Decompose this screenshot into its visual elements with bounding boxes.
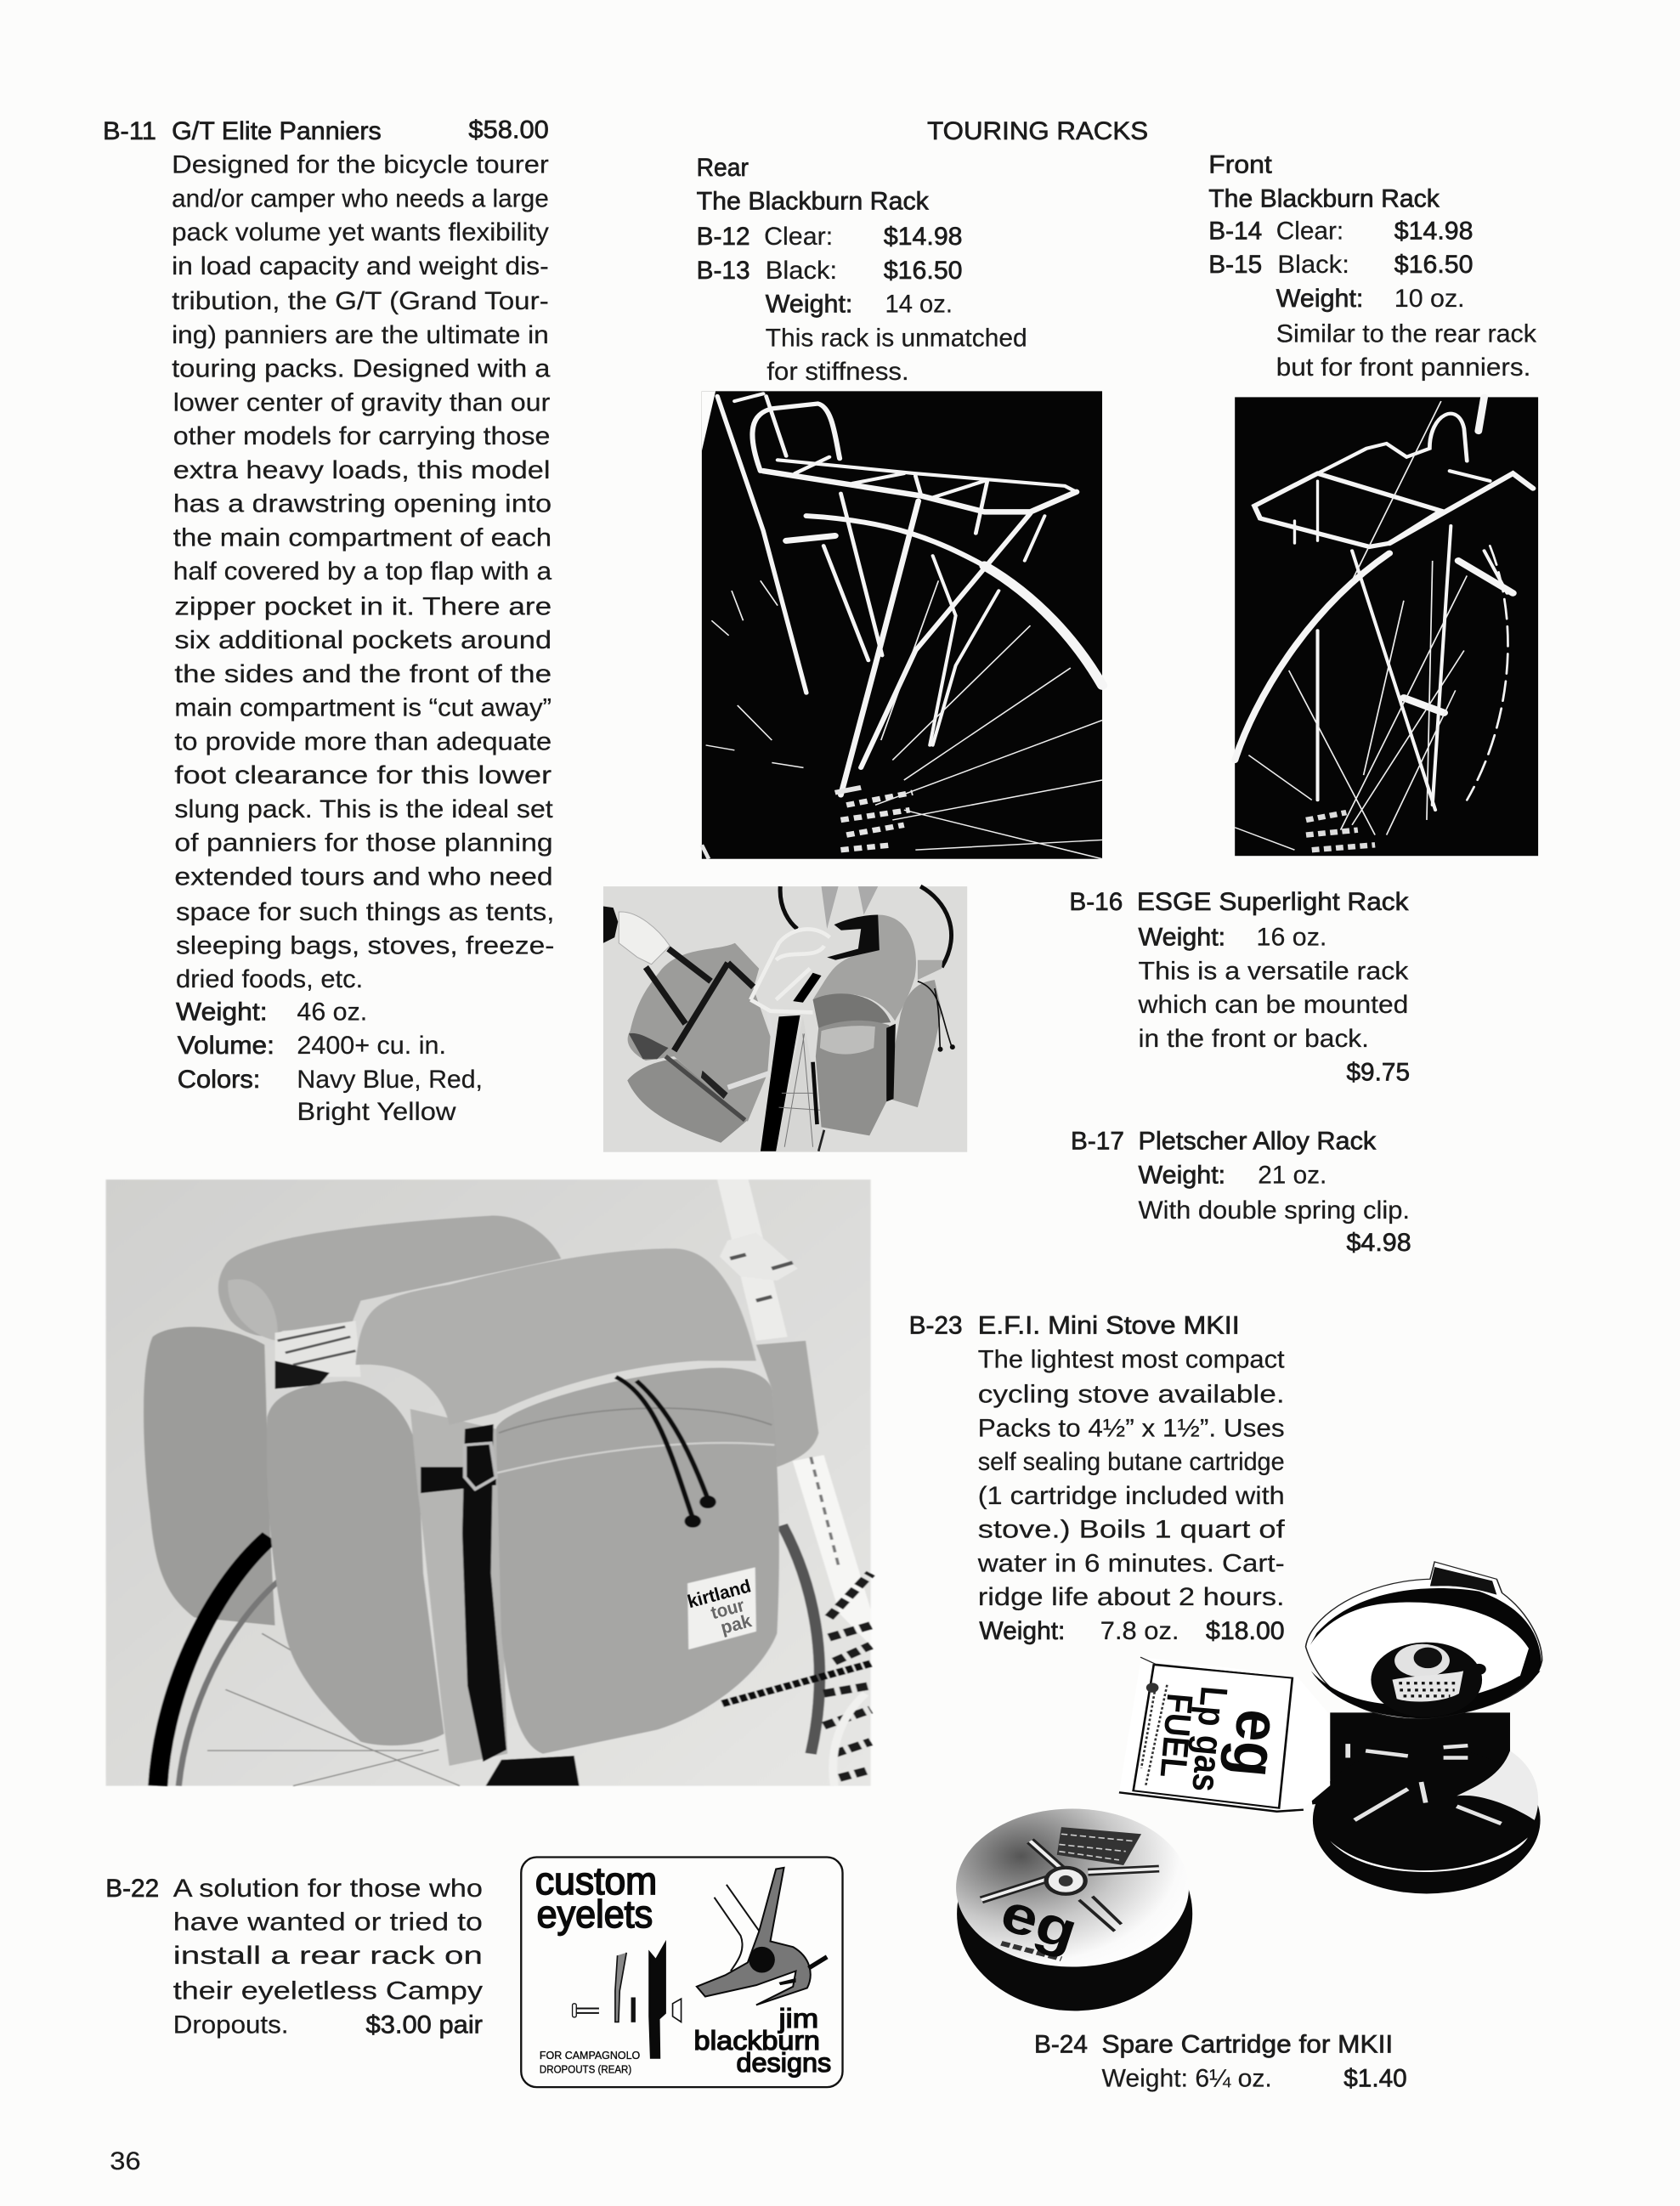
- brand label on pannier: [685, 1575, 761, 1645]
- description paragraph: six additional pockets around: [174, 626, 552, 654]
- panel: B-24 Spare Cartridge: B-24: [1034, 2031, 1088, 2059]
- panel: B-17 Pletscher Alloy Rack: Pletscher Alloy Rack: [1138, 1128, 1376, 1156]
- description paragraph: extra heavy loads, this model: [173, 456, 550, 484]
- panel: B-23 E.F.I. Mini Stove: cycling stove available.: [978, 1381, 1285, 1409]
- logo: custom eyelets, Jim Blackburn Designs: blackburn: [694, 2025, 820, 2056]
- panel: rear rack text: $16.50: [884, 257, 963, 285]
- fuel can label: [1152, 1685, 1293, 1794]
- panel: B-16 ESGE Superlight Rack: $9.75: [1347, 1059, 1410, 1087]
- logo: custom eyelets, Jim Blackburn Designs: custom: [535, 1859, 657, 1903]
- panel: B-17 Pletscher Alloy Rack: 21 oz.: [1258, 1161, 1326, 1189]
- panel: B-22 eyelets text: A solution for those who: [173, 1875, 483, 1903]
- description paragraph: to provide more than adequate: [174, 727, 552, 755]
- description paragraph: in load capacity and weight dis-: [172, 252, 549, 280]
- panel: B-16 ESGE Superlight Rack: 16 oz.: [1257, 924, 1326, 952]
- specifications: [176, 998, 483, 1126]
- brand label on pannier: kirtland: [685, 1575, 753, 1612]
- brand label on pannier: tour: [709, 1595, 747, 1623]
- panel: front rack text: Black:: [1277, 251, 1349, 279]
- photo: stove and fuel cartridges: [956, 1562, 1542, 2011]
- panel: front rack text: $16.50: [1394, 251, 1474, 279]
- panel: B-16 ESGE Superlight Rack: B-16: [1069, 888, 1123, 916]
- specifications: 46 oz.: [297, 998, 367, 1026]
- stove lid with burner: [1306, 1562, 1542, 1719]
- description paragraph: [172, 151, 554, 993]
- specifications: Navy Blue, Red,: [297, 1066, 483, 1094]
- panel: B-23 E.F.I. Mini Stove: (1 cartridge included with: [978, 1482, 1285, 1510]
- description paragraph: lower center of gravity than our: [173, 388, 551, 416]
- description paragraph: space for such things as tents,: [176, 898, 554, 926]
- specifications: Bright Yellow: [297, 1098, 456, 1126]
- description paragraph: slung pack. This is the ideal set: [174, 795, 554, 823]
- panel: B-23 E.F.I. Mini Stove: The lightest most compact: [978, 1345, 1285, 1373]
- panel: B-22 eyelets text: $3.00 pair: [366, 2011, 483, 2039]
- description paragraph: zipper pocket in it. There are: [174, 593, 552, 621]
- exploded eyelet parts: [573, 1940, 682, 2059]
- panel: B-23 E.F.I. Mini Stove: E.F.I. Mini Stove MKII: [978, 1312, 1240, 1340]
- heading: Touring Racks: TOURING RACKS: [927, 117, 1148, 145]
- panel: B-23 E.F.I. Mini Stove: 7.8 oz.: [1100, 1617, 1179, 1645]
- panel: rear rack text: B-13: [697, 257, 750, 285]
- panel: B-16 ESGE Superlight Rack: Weight:: [1138, 924, 1225, 952]
- panel: B-22 eyelets text: Dropouts.: [173, 2011, 289, 2039]
- description paragraph: touring packs. Designed with a: [172, 355, 551, 383]
- photo: Kirtland Tour Pak panniers on bicycle: [106, 1179, 871, 1786]
- specifications: Volume:: [178, 1032, 274, 1060]
- panel: B-22 eyelets text: [105, 1875, 483, 2039]
- panel: B-23 E.F.I. Mini Stove: [909, 1312, 1286, 1645]
- panel: front rack text: $14.98: [1394, 217, 1474, 245]
- item heading B-11: G/T Elite Panniers: [172, 117, 382, 145]
- description paragraph: dried foods, etc.: [176, 965, 363, 993]
- panel: B-17 Pletscher Alloy Rack: Weight:: [1138, 1161, 1225, 1189]
- cartridge logo: eg: [994, 1882, 1084, 1962]
- panel: B-16 ESGE Superlight Rack: ESGE Superlight Rack: [1137, 888, 1408, 916]
- panel: rear rack text: $14.98: [884, 223, 963, 251]
- logo: custom eyelets, Jim Blackburn Designs: DROPOUTS (REAR): [540, 2063, 631, 2075]
- description paragraph: sleeping bags, stoves, freeze-: [176, 932, 554, 960]
- specifications: Weight:: [176, 998, 268, 1026]
- hand: [619, 912, 670, 964]
- panel: B-17 Pletscher Alloy Rack: $4.98: [1347, 1229, 1411, 1257]
- logo: custom eyelets, Jim Blackburn Designs: designs: [737, 2047, 831, 2078]
- hub: [1306, 812, 1375, 850]
- panel: B-23 E.F.I. Mini Stove: Packs to 4½” x 1½”. Uses: [978, 1414, 1285, 1442]
- description paragraph: ing) panniers are the ultimate in: [172, 321, 549, 349]
- panel: B-16 ESGE Superlight Rack: This is a versatile rack: [1138, 957, 1408, 985]
- panel: front rack text: 10 oz.: [1394, 285, 1465, 313]
- specifications: 2400+ cu. in.: [297, 1032, 446, 1060]
- panel: rear rack text: 14 oz.: [885, 291, 953, 319]
- description paragraph: foot clearance for this lower: [174, 761, 552, 789]
- panel: B-23 E.F.I. Mini Stove: $18.00: [1206, 1617, 1285, 1645]
- panel: front rack text: Clear:: [1276, 217, 1343, 245]
- description paragraph: extended tours and who need: [174, 863, 553, 891]
- description paragraph: main compartment is “cut away”: [174, 694, 552, 722]
- panel: B-24 Spare Cartridge: [1034, 2031, 1407, 2092]
- description paragraph: tribution, the G/T (Grand Tour-: [172, 287, 549, 315]
- panel: front rack text: Similar to the rear rack: [1276, 320, 1536, 348]
- logo: custom eyelets, Jim Blackburn Designs: jim: [778, 2003, 818, 2033]
- panel: B-22 eyelets text: install a rear rack on: [173, 1942, 483, 1970]
- item heading B-11: B-11: [103, 117, 156, 145]
- panel: rear rack text: for stiffness.: [766, 358, 909, 386]
- panel: rear rack text: [697, 154, 1027, 386]
- item heading B-11: $58.00: [468, 116, 549, 144]
- panel: B-24 Spare Cartridge: $1.40: [1343, 2064, 1407, 2092]
- panel: B-17 Pletscher Alloy Rack: With double spring clip.: [1138, 1196, 1410, 1225]
- panel: rear rack text: The Blackburn Rack: [697, 188, 929, 216]
- panel: B-24 Spare Cartridge: Spare Cartridge for MKII: [1101, 2031, 1393, 2059]
- brand label on pannier: pak: [719, 1610, 754, 1638]
- panel: front rack text: B-15: [1208, 251, 1262, 279]
- description paragraph: the main compartment of each: [173, 523, 552, 552]
- panel: front rack text: but for front panniers.: [1276, 354, 1530, 382]
- panel: front rack text: [1208, 151, 1536, 382]
- logo: custom eyelets, Jim Blackburn Designs: [521, 1858, 843, 2087]
- hub: [702, 788, 913, 859]
- panel: B-16 ESGE Superlight Rack: which can be mounted: [1137, 991, 1408, 1019]
- logo: custom eyelets, Jim Blackburn Designs: eyelets: [537, 1892, 653, 1936]
- panel: B-17 Pletscher Alloy Rack: [1071, 1128, 1411, 1257]
- panel: B-23 E.F.I. Mini Stove: B-23: [909, 1312, 963, 1340]
- fuel can label: FUEL: [1152, 1692, 1200, 1779]
- panel: front rack text: Front: [1208, 151, 1273, 179]
- photo: rear Blackburn rack: [702, 391, 1102, 859]
- fuel can: [1119, 1657, 1330, 1812]
- panel: rear rack text: This rack is unmatched: [766, 324, 1027, 352]
- logo: custom eyelets, Jim Blackburn Designs: FOR CAMPAGNOLO: [540, 2050, 640, 2062]
- panel: rear rack text: B-12: [697, 223, 750, 251]
- panel: B-22 eyelets text: their eyeletless Campy: [173, 1977, 483, 2005]
- panel: B-22 eyelets text: B-22: [105, 1875, 159, 1903]
- panel: B-17 Pletscher Alloy Rack: B-17: [1071, 1128, 1124, 1156]
- item heading B-11: [103, 116, 549, 145]
- panel: rear rack text: Clear:: [764, 223, 833, 251]
- panel: front rack text: B-14: [1208, 217, 1262, 245]
- panel: B-23 E.F.I. Mini Stove: water in 6 minutes. Cart-: [977, 1549, 1285, 1577]
- panel: B-24 Spare Cartridge: Weight: 6¼ oz.: [1101, 2064, 1272, 2092]
- description paragraph: has a drawstring opening into: [173, 490, 552, 518]
- panel: front rack text: The Blackburn Rack: [1208, 184, 1440, 212]
- description paragraph: and/or camper who needs a large: [172, 184, 549, 212]
- spare cartridge: [956, 1808, 1192, 2011]
- panel: rear rack text: Weight:: [766, 291, 852, 319]
- stove base: [1310, 1712, 1541, 1893]
- panel: B-23 E.F.I. Mini Stove: ridge life about 2 hours.: [978, 1583, 1285, 1611]
- photo: front Blackburn rack: [1235, 397, 1538, 856]
- fuel can label: eg: [1219, 1707, 1293, 1780]
- panel: B-16 ESGE Superlight Rack: [1069, 888, 1410, 1087]
- panel: rear rack text: Black:: [766, 257, 837, 285]
- description paragraph: half covered by a top flap with a: [173, 557, 552, 585]
- panel: B-22 eyelets text: have wanted or tried to: [173, 1909, 483, 1937]
- panel: rear rack text: Rear: [697, 154, 749, 182]
- description paragraph: Designed for the bicycle tourer: [172, 151, 549, 179]
- photo: panniers being attached to bicycle: [603, 886, 967, 1152]
- page number: 36: [110, 2147, 141, 2175]
- assembled dropout with rack: [697, 1868, 827, 2005]
- panel: B-11 G/T Elite Panniers text: [103, 116, 554, 1126]
- description paragraph: the sides and the front of the: [174, 660, 552, 688]
- panel: B-23 E.F.I. Mini Stove: stove.) Boils 1 quart of: [978, 1516, 1286, 1544]
- description paragraph: other models for carrying those: [173, 422, 550, 450]
- fuel can label: Lp gas: [1184, 1685, 1235, 1794]
- description paragraph: of panniers for those planning: [174, 829, 553, 857]
- panel: B-23 E.F.I. Mini Stove: Weight:: [979, 1617, 1065, 1645]
- specifications: Colors:: [178, 1066, 260, 1094]
- panel: B-23 E.F.I. Mini Stove: self sealing butane cartridge: [978, 1448, 1285, 1476]
- description paragraph: pack volume yet wants flexibility: [172, 218, 549, 246]
- panel: front rack text: Weight:: [1276, 285, 1363, 313]
- panel: B-16 ESGE Superlight Rack: in the front or back.: [1138, 1025, 1369, 1053]
